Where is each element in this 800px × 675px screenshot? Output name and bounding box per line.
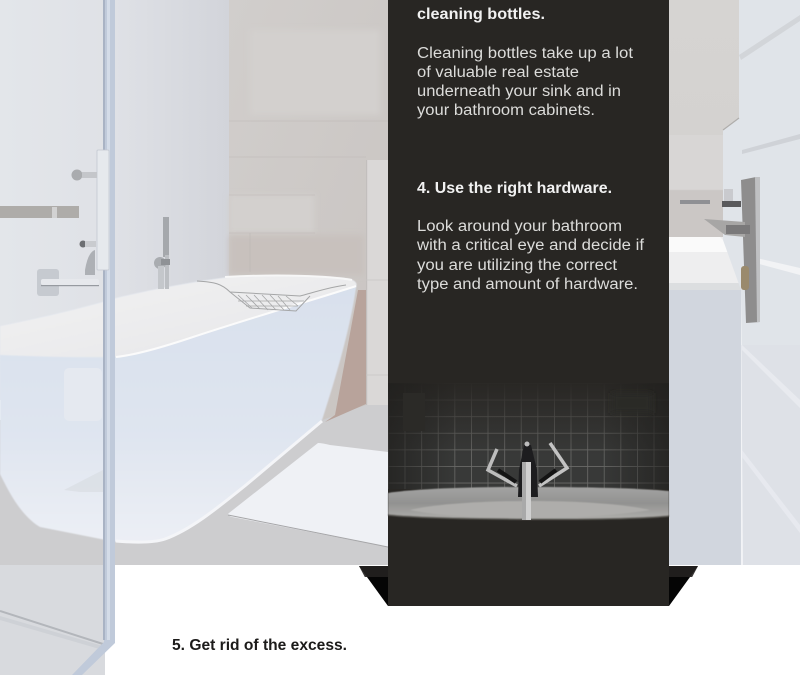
text: tip 4 body: you are utilizing the correct	[417, 257, 618, 274]
panel: dark text column	[388, 0, 669, 606]
hinge bracket	[97, 150, 109, 270]
text: tip 3 body	[417, 45, 634, 119]
sink photo	[388, 380, 669, 520]
basin	[388, 487, 669, 520]
text: tip 4 heading: 4. Use the right hardware.	[417, 180, 612, 197]
text: tip 3 body: of valuable real estate	[417, 64, 579, 81]
door handle plate	[704, 177, 760, 323]
mixer tap	[488, 442, 567, 520]
wall column	[366, 160, 389, 405]
hand shower fixture	[154, 217, 170, 289]
text: tip 5 heading: 5. Get rid of the excess.	[172, 637, 347, 654]
text: tip 4 body: Look around your bathroom	[417, 218, 622, 235]
tile backsplash	[388, 380, 669, 489]
towel bar	[0, 206, 79, 218]
panel: right side with sink and door	[669, 0, 800, 565]
vanity sink	[669, 237, 741, 565]
text: tip 4 body	[416, 218, 645, 293]
knob	[72, 170, 97, 248]
reflected tub cup	[64, 368, 102, 421]
pink shadow behind tub	[325, 290, 366, 422]
photo: bathroom with bathtub	[0, 0, 389, 565]
text: tip 3 body: underneath your sink and in	[417, 83, 621, 100]
text: tip 3 body: Cleaning bottles take up a lot	[417, 45, 634, 62]
text: tip 4 body: type and amount of hardware.	[417, 276, 638, 293]
door frame rail	[72, 0, 115, 675]
bathtub	[0, 276, 356, 542]
back wall	[0, 0, 230, 400]
floor	[0, 405, 389, 565]
wall faucet	[37, 250, 99, 296]
panel: shower glass door	[0, 0, 115, 675]
bath mat	[228, 443, 388, 547]
ribbon fold: left triangle	[359, 566, 388, 606]
text: tip 3 heading end: cleaning bottles.	[417, 6, 545, 23]
stone tile wall	[229, 0, 389, 425]
ribbon fold: right triangle	[669, 566, 698, 606]
wire caddy on tub	[197, 281, 346, 311]
text: tip 3 body: your bathroom cabinets.	[417, 102, 595, 119]
faucet behind handle	[680, 189, 741, 207]
right wall	[669, 0, 740, 290]
door	[723, 0, 800, 565]
text: tip 4 body: with a critical eye and decide if	[416, 237, 645, 254]
